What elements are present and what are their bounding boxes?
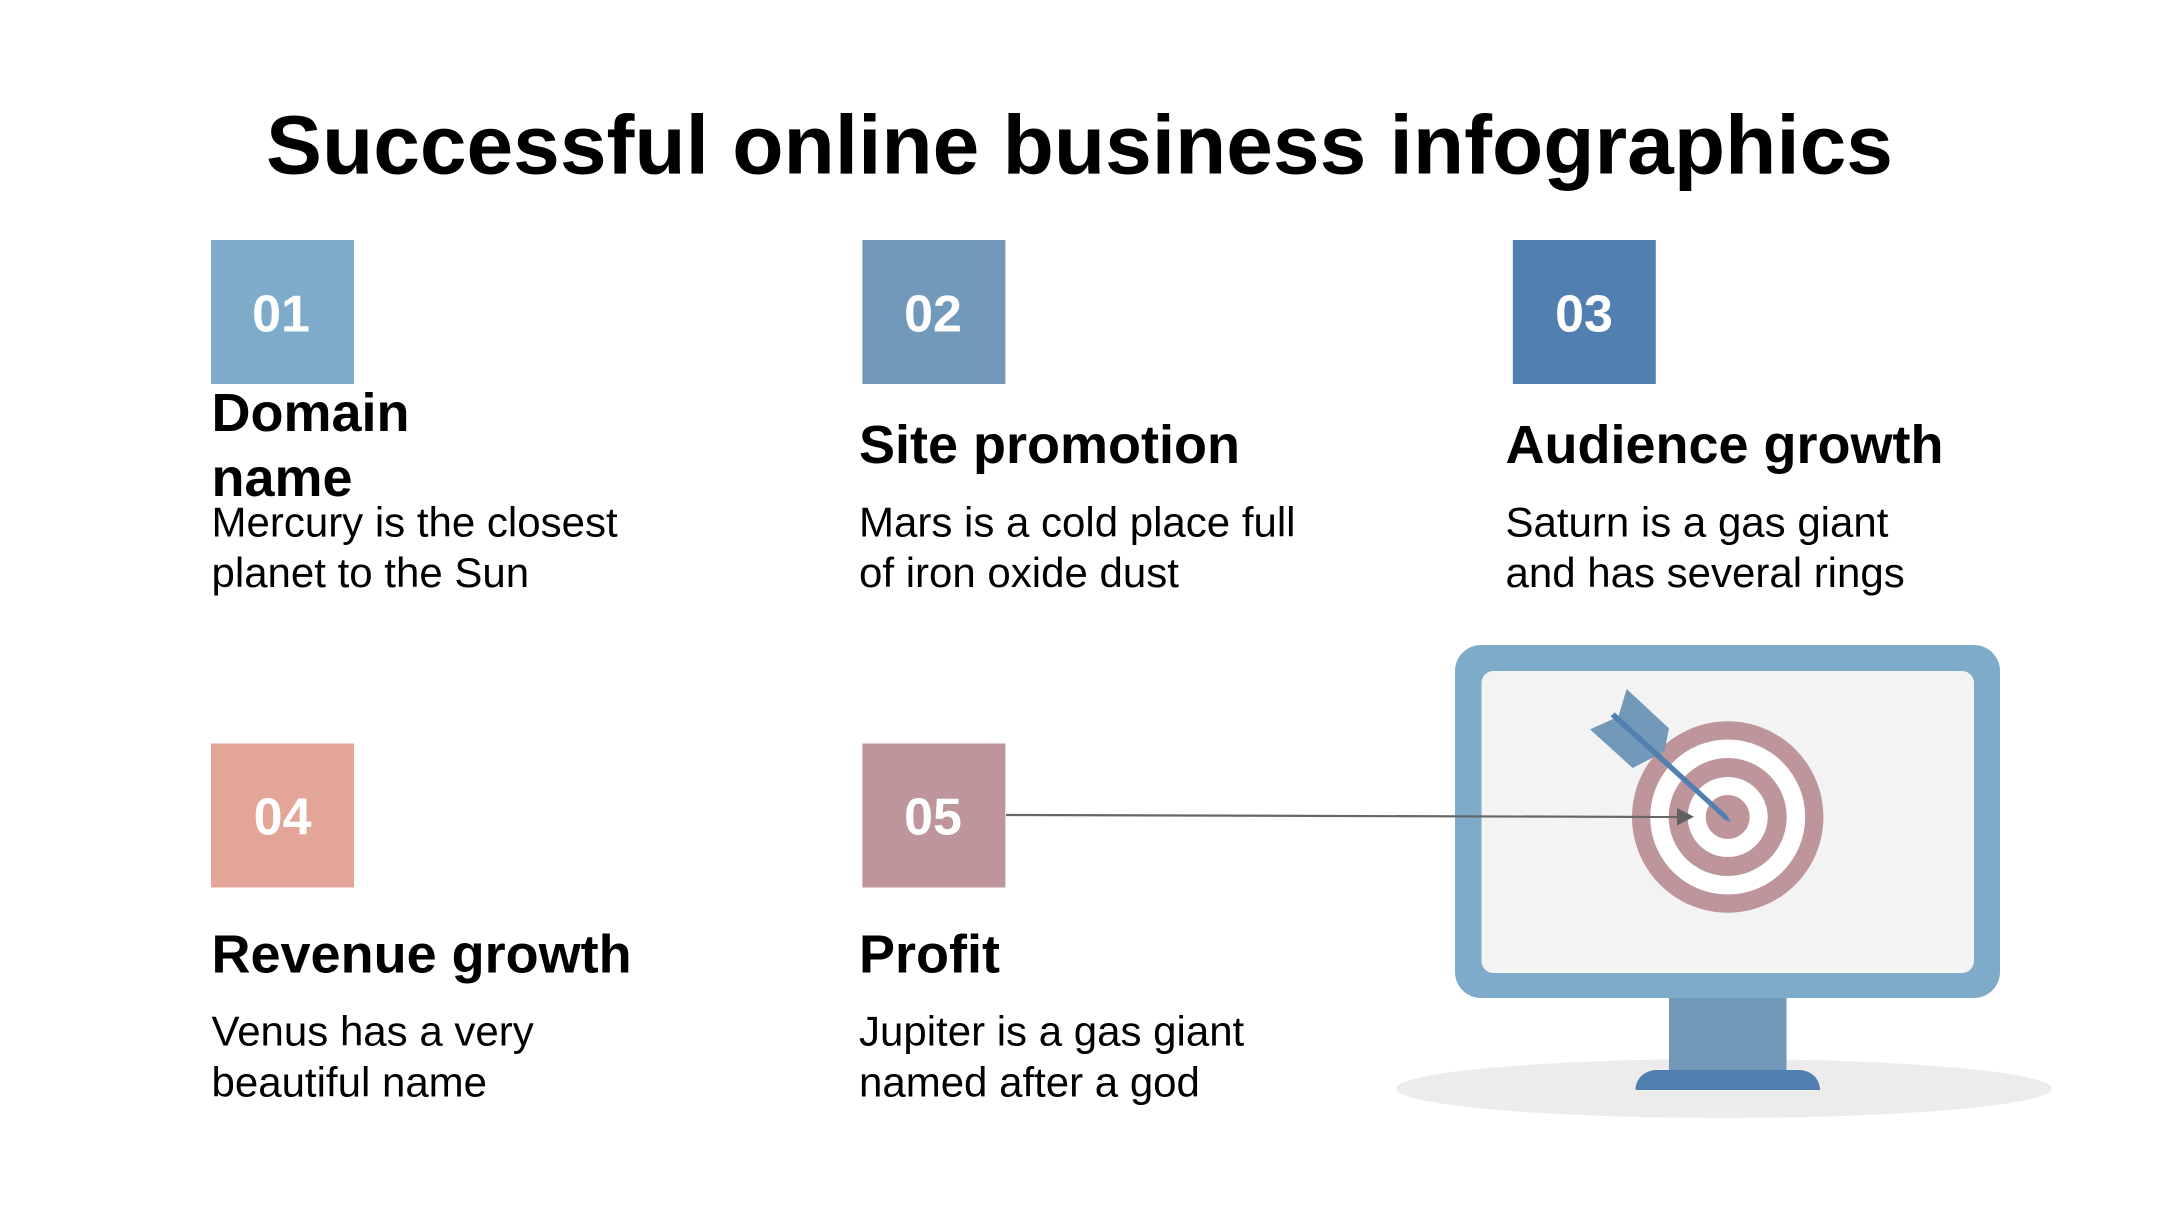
heading: audience growth: Audience growth xyxy=(1506,415,1944,475)
text: domain name description: Mercury is the closest xyxy=(212,498,618,546)
text: audience growth description: and has several rings xyxy=(1506,549,1905,596)
heading: domain name xyxy=(212,383,410,508)
monitor frame xyxy=(1455,645,2000,998)
number badge 01 xyxy=(211,240,354,384)
icon: dart xyxy=(1590,689,1731,822)
text: audience growth description xyxy=(1506,498,1905,596)
text: revenue growth description: Venus has a very xyxy=(212,1008,534,1054)
monitor stand neck xyxy=(1669,998,1786,1071)
icon: target xyxy=(1632,721,1823,913)
heading: site promotion: Site promotion xyxy=(859,415,1240,475)
panel: 01 domain name xyxy=(211,240,618,596)
number badge 03 xyxy=(1513,240,1656,384)
text: profit description: named after a god xyxy=(859,1058,1200,1106)
heading: domain name: Domain xyxy=(212,383,410,443)
text: site promotion description: Mars is a cold place full xyxy=(859,498,1296,546)
number badge 04: 04 xyxy=(254,788,312,846)
arrow: from 05 to target xyxy=(1006,808,1694,826)
text: audience growth description: Saturn is a gas giant xyxy=(1506,498,1889,546)
text: site promotion description xyxy=(859,498,1296,596)
panel: 05 profit xyxy=(859,744,1245,1106)
number badge 05 xyxy=(862,744,1005,888)
text: domain name description: planet to the Sun xyxy=(212,549,529,596)
monitor stand base xyxy=(1636,1070,1820,1090)
number badge 04 xyxy=(211,744,354,888)
number badge 05: 05 xyxy=(904,788,962,846)
panel: 04 revenue growth xyxy=(211,744,632,1106)
heading: revenue growth: Revenue growth xyxy=(212,924,632,984)
text: profit description: Jupiter is a gas giant xyxy=(859,1008,1245,1054)
monitor screen xyxy=(1482,671,1974,973)
text: site promotion description: of iron oxide dust xyxy=(859,549,1179,596)
title: Successful online business infographics xyxy=(266,98,1893,192)
heading: domain name: name xyxy=(212,448,353,508)
number badge 02 xyxy=(862,240,1005,384)
monitor shadow xyxy=(1396,1059,2052,1118)
number badge 01: 01 xyxy=(252,286,310,344)
panel: 03 audience growth xyxy=(1506,240,1944,596)
panel: 02 site promotion xyxy=(859,240,1296,596)
text: revenue growth description: beautiful name xyxy=(212,1058,487,1106)
text: profit description xyxy=(859,1008,1245,1106)
text: domain name description xyxy=(212,498,618,596)
text: revenue growth description xyxy=(212,1008,534,1106)
heading: profit: Profit xyxy=(859,924,1000,984)
illustration: monitor with target xyxy=(1396,645,2052,1118)
number badge 02: 02 xyxy=(904,286,962,344)
number badge 03: 03 xyxy=(1555,286,1613,344)
